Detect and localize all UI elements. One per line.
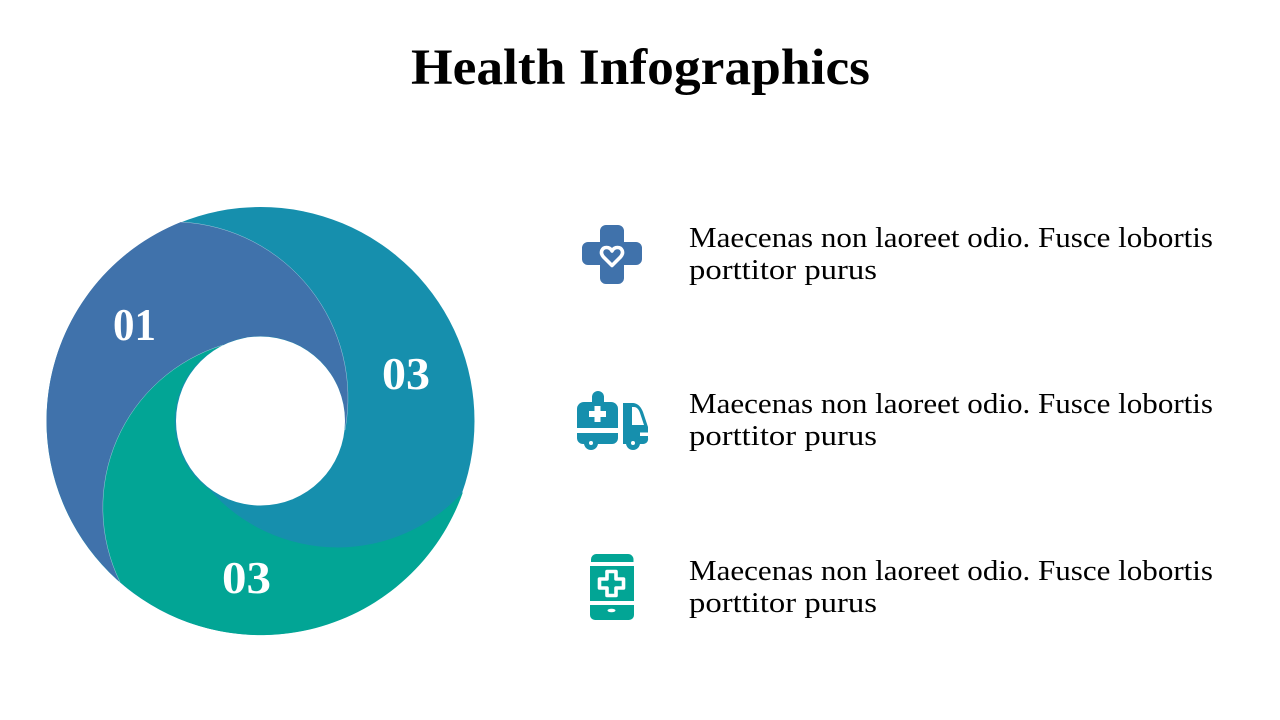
chart: swirl donut bbox=[46, 207, 474, 635]
label: 03 teal: 03 bbox=[382, 348, 430, 399]
icon: medical cross with heart bbox=[582, 225, 642, 284]
text block 1: porttitor purus bbox=[689, 254, 877, 286]
icon: phone with cross bbox=[590, 554, 634, 620]
text block 3 bbox=[689, 555, 1213, 619]
title: Health Infographics bbox=[411, 40, 870, 96]
text block 3: porttitor purus bbox=[689, 587, 877, 619]
text block 1 bbox=[689, 222, 1213, 286]
text block 2 bbox=[689, 388, 1213, 452]
icon: ambulance bbox=[577, 391, 649, 450]
label: 01: 01 bbox=[113, 299, 156, 350]
segment: green 03 bbox=[103, 345, 463, 635]
center hole bbox=[176, 336, 345, 506]
label: 03 green: 03 bbox=[222, 552, 271, 603]
text block 2: Maecenas non laoreet odio. Fusce lobortis bbox=[689, 388, 1213, 420]
segment: teal 03 bbox=[46, 207, 474, 635]
text block 1: Maecenas non laoreet odio. Fusce lobortis bbox=[689, 222, 1213, 254]
text block 2: porttitor purus bbox=[689, 420, 877, 452]
segment: blue 01 bbox=[47, 222, 348, 582]
text block 3: Maecenas non laoreet odio. Fusce lobortis bbox=[689, 555, 1213, 587]
